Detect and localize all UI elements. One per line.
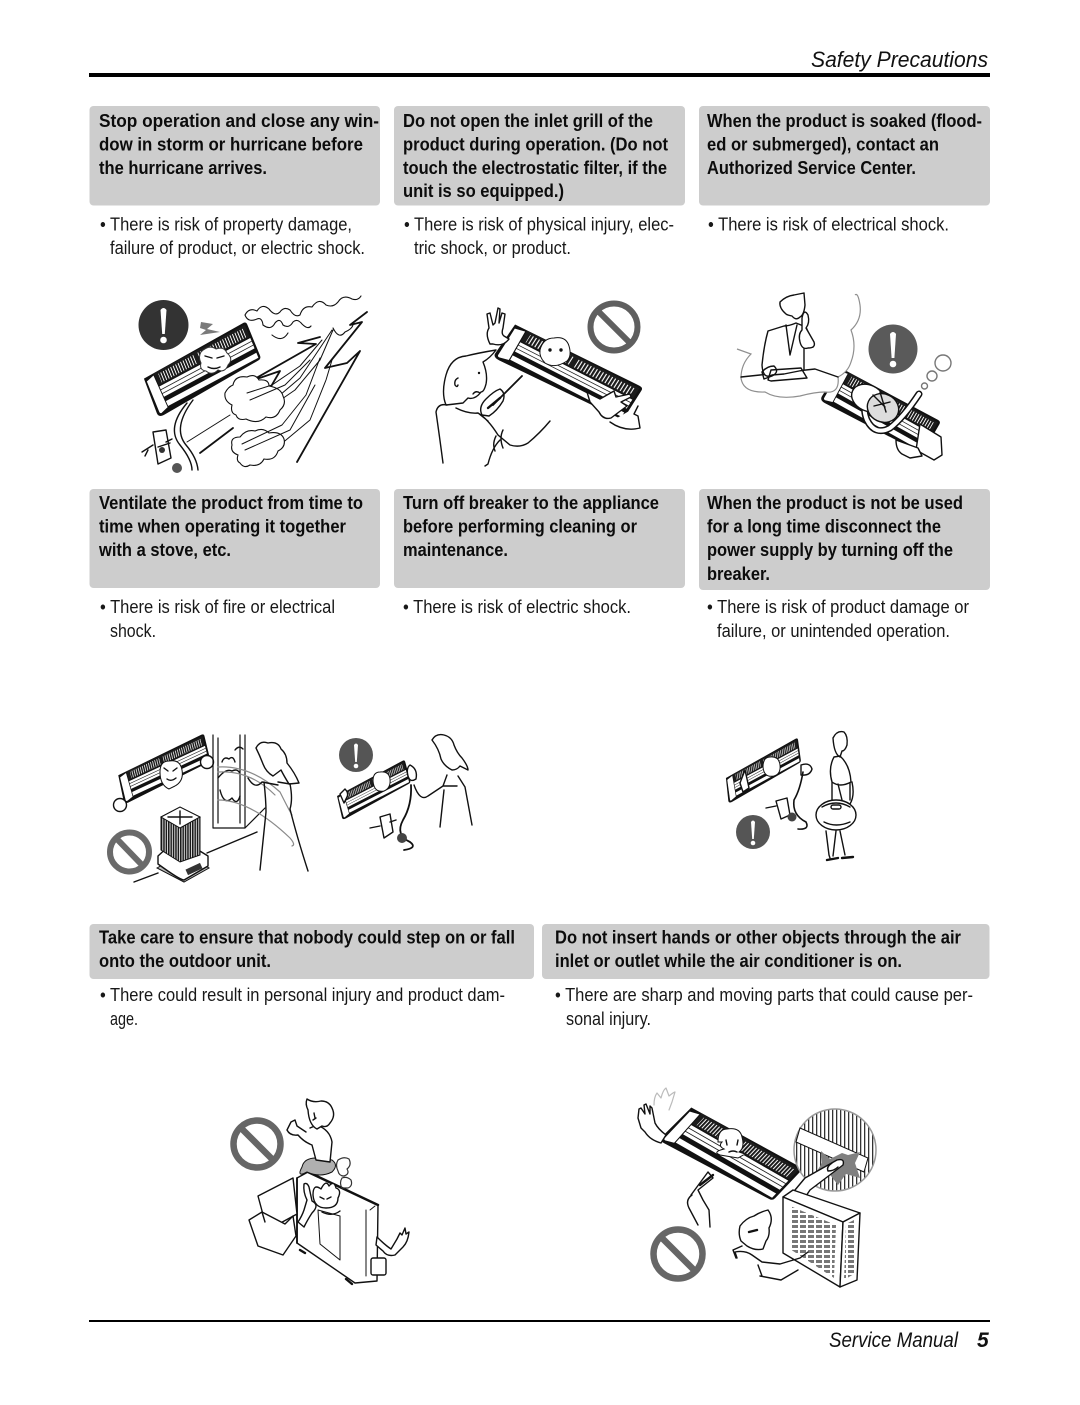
illustration: woman opening window near heater — [110, 734, 308, 882]
heading box: breaker: Turn off breaker to the appliance — [403, 492, 659, 513]
panel: outdoor unit warning — [90, 924, 534, 1284]
heading box: ventilate — [90, 489, 380, 588]
heading box: disuse: breaker. — [707, 563, 770, 584]
heading box: outdoor unit: onto the outdoor unit. — [99, 950, 271, 971]
heading box: flood: Authorized Service Center. — [707, 157, 916, 178]
risk text: flood: • There is risk of electrical shock. — [708, 214, 949, 234]
risk text: disuse — [707, 596, 969, 641]
page footer: 5 — [977, 1329, 989, 1352]
icon: warning exclamation — [736, 815, 770, 849]
person on phone — [780, 293, 805, 319]
illustration: woman cleaning unit with breaker off — [336, 735, 472, 850]
icon: warning exclamation — [138, 300, 188, 350]
heading box: outdoor unit — [90, 924, 534, 979]
heading box: breaker: before performing cleaning or — [403, 516, 637, 536]
page footer: Service Manual — [829, 1329, 959, 1352]
icon: prohibition — [110, 832, 149, 872]
heading box: flood: When the product is soaked (flood- — [707, 110, 982, 131]
illustration: air conditioner in a storm — [138, 296, 367, 473]
illustration: woman leaving with bag — [725, 732, 856, 860]
risk text: outdoor unit: age. — [110, 1008, 138, 1029]
panel: ventilate warning — [90, 489, 380, 882]
heading box: disuse: for a long time disconnect the — [707, 516, 941, 536]
illustration: soaked unit with service call thought bubble — [737, 293, 951, 460]
heading box: storm — [90, 106, 380, 206]
icon: prohibition — [590, 304, 638, 350]
heading box: breaker: maintenance. — [403, 539, 508, 560]
heading box: outdoor unit: Take care to ensure that nobody could step on or fall — [99, 926, 515, 948]
icon: prohibition — [654, 1230, 702, 1278]
icon: warning exclamation — [868, 324, 918, 374]
tube and knot — [865, 394, 919, 431]
risk text: outdoor unit — [100, 984, 505, 1029]
heading box: moving parts — [542, 924, 990, 979]
heading box: ventilate: with a stove, etc. — [98, 539, 231, 560]
risk text: ventilate — [100, 596, 335, 641]
risk text: ventilate: • There is risk of fire or electrical — [100, 596, 335, 617]
heading box: moving parts: inlet or outlet while the air conditioner is on. — [555, 950, 902, 971]
heading box: flood — [699, 106, 990, 206]
risk text: storm: failure of product, or electric shock. — [110, 237, 365, 258]
illustration: boy sitting on outdoor unit — [234, 1099, 409, 1284]
risk text: inlet grill: • There is risk of physical injury, elec- — [404, 214, 674, 234]
heading box: inlet grill: product during operation. (Do not — [403, 134, 668, 154]
heading box: breaker — [394, 489, 685, 588]
icon: warning exclamation — [339, 738, 373, 772]
outdoor unit with grille — [783, 1190, 860, 1287]
heading box: disuse — [699, 489, 990, 590]
risk text: moving parts — [555, 984, 973, 1029]
heading box: inlet grill: unit is so equipped.) — [403, 180, 564, 201]
panel: moving parts warning — [542, 924, 990, 1287]
panel: breaker warning — [336, 489, 685, 850]
heading box: ventilate: time when operating it together — [99, 516, 346, 536]
risk text: disuse: failure, or unintended operation. — [717, 620, 950, 641]
cloud thought bubble — [737, 294, 860, 397]
risk text: breaker: • There is risk of electric shock. — [403, 596, 631, 617]
risk text: outdoor unit: • There could result in personal injury and product dam- — [100, 984, 505, 1005]
heading box: moving parts: Do not insert hands or other objects through the air — [555, 926, 961, 948]
heading box: disuse: power supply by turning off the — [707, 539, 953, 560]
panel: long disuse warning — [699, 489, 990, 860]
heading box: inlet grill: touch the electrostatic filter, if the — [403, 157, 667, 178]
page header title: Safety Precautions — [811, 47, 988, 72]
heading box: storm: dow in storm or hurricane before — [99, 134, 363, 154]
footer rule — [89, 1320, 990, 1322]
risk text: moving parts: • There are sharp and moving parts that could cause per- — [555, 984, 973, 1005]
risk text: inlet grill: tric shock, or product. — [414, 237, 571, 258]
illustration: hands inserted into unit — [638, 1088, 876, 1287]
risk text: storm: • There is risk of property damage, — [100, 214, 352, 234]
heading box: ventilate: Ventilate the product from time to — [99, 492, 363, 513]
header rule — [89, 73, 990, 77]
risk text: storm — [100, 214, 365, 258]
illustration: person with screwdriver at open grill — [436, 304, 643, 466]
heading box: inlet grill: Do not open the inlet grill of the — [403, 110, 653, 131]
icon: magnifier of hand on fan grille — [794, 1109, 876, 1205]
heading box: storm: the hurricane arrives. — [99, 157, 267, 178]
heading box: storm: Stop operation and close any win- — [99, 110, 379, 131]
risk text: moving parts: sonal injury. — [566, 1008, 651, 1029]
icon: prohibition — [234, 1120, 280, 1168]
risk text: inlet grill — [404, 214, 674, 258]
panel: storm warning — [90, 106, 380, 473]
risk text: disuse: • There is risk of product damage or — [707, 596, 969, 617]
heading box: flood: ed or submerged), contact an — [707, 134, 939, 154]
panel: inlet grill warning — [394, 106, 685, 466]
heading box: disuse: When the product is not be used — [707, 492, 963, 513]
heading box: inlet grill — [394, 106, 685, 206]
panel: flood warning — [699, 106, 990, 460]
risk text: ventilate: shock. — [110, 620, 156, 641]
